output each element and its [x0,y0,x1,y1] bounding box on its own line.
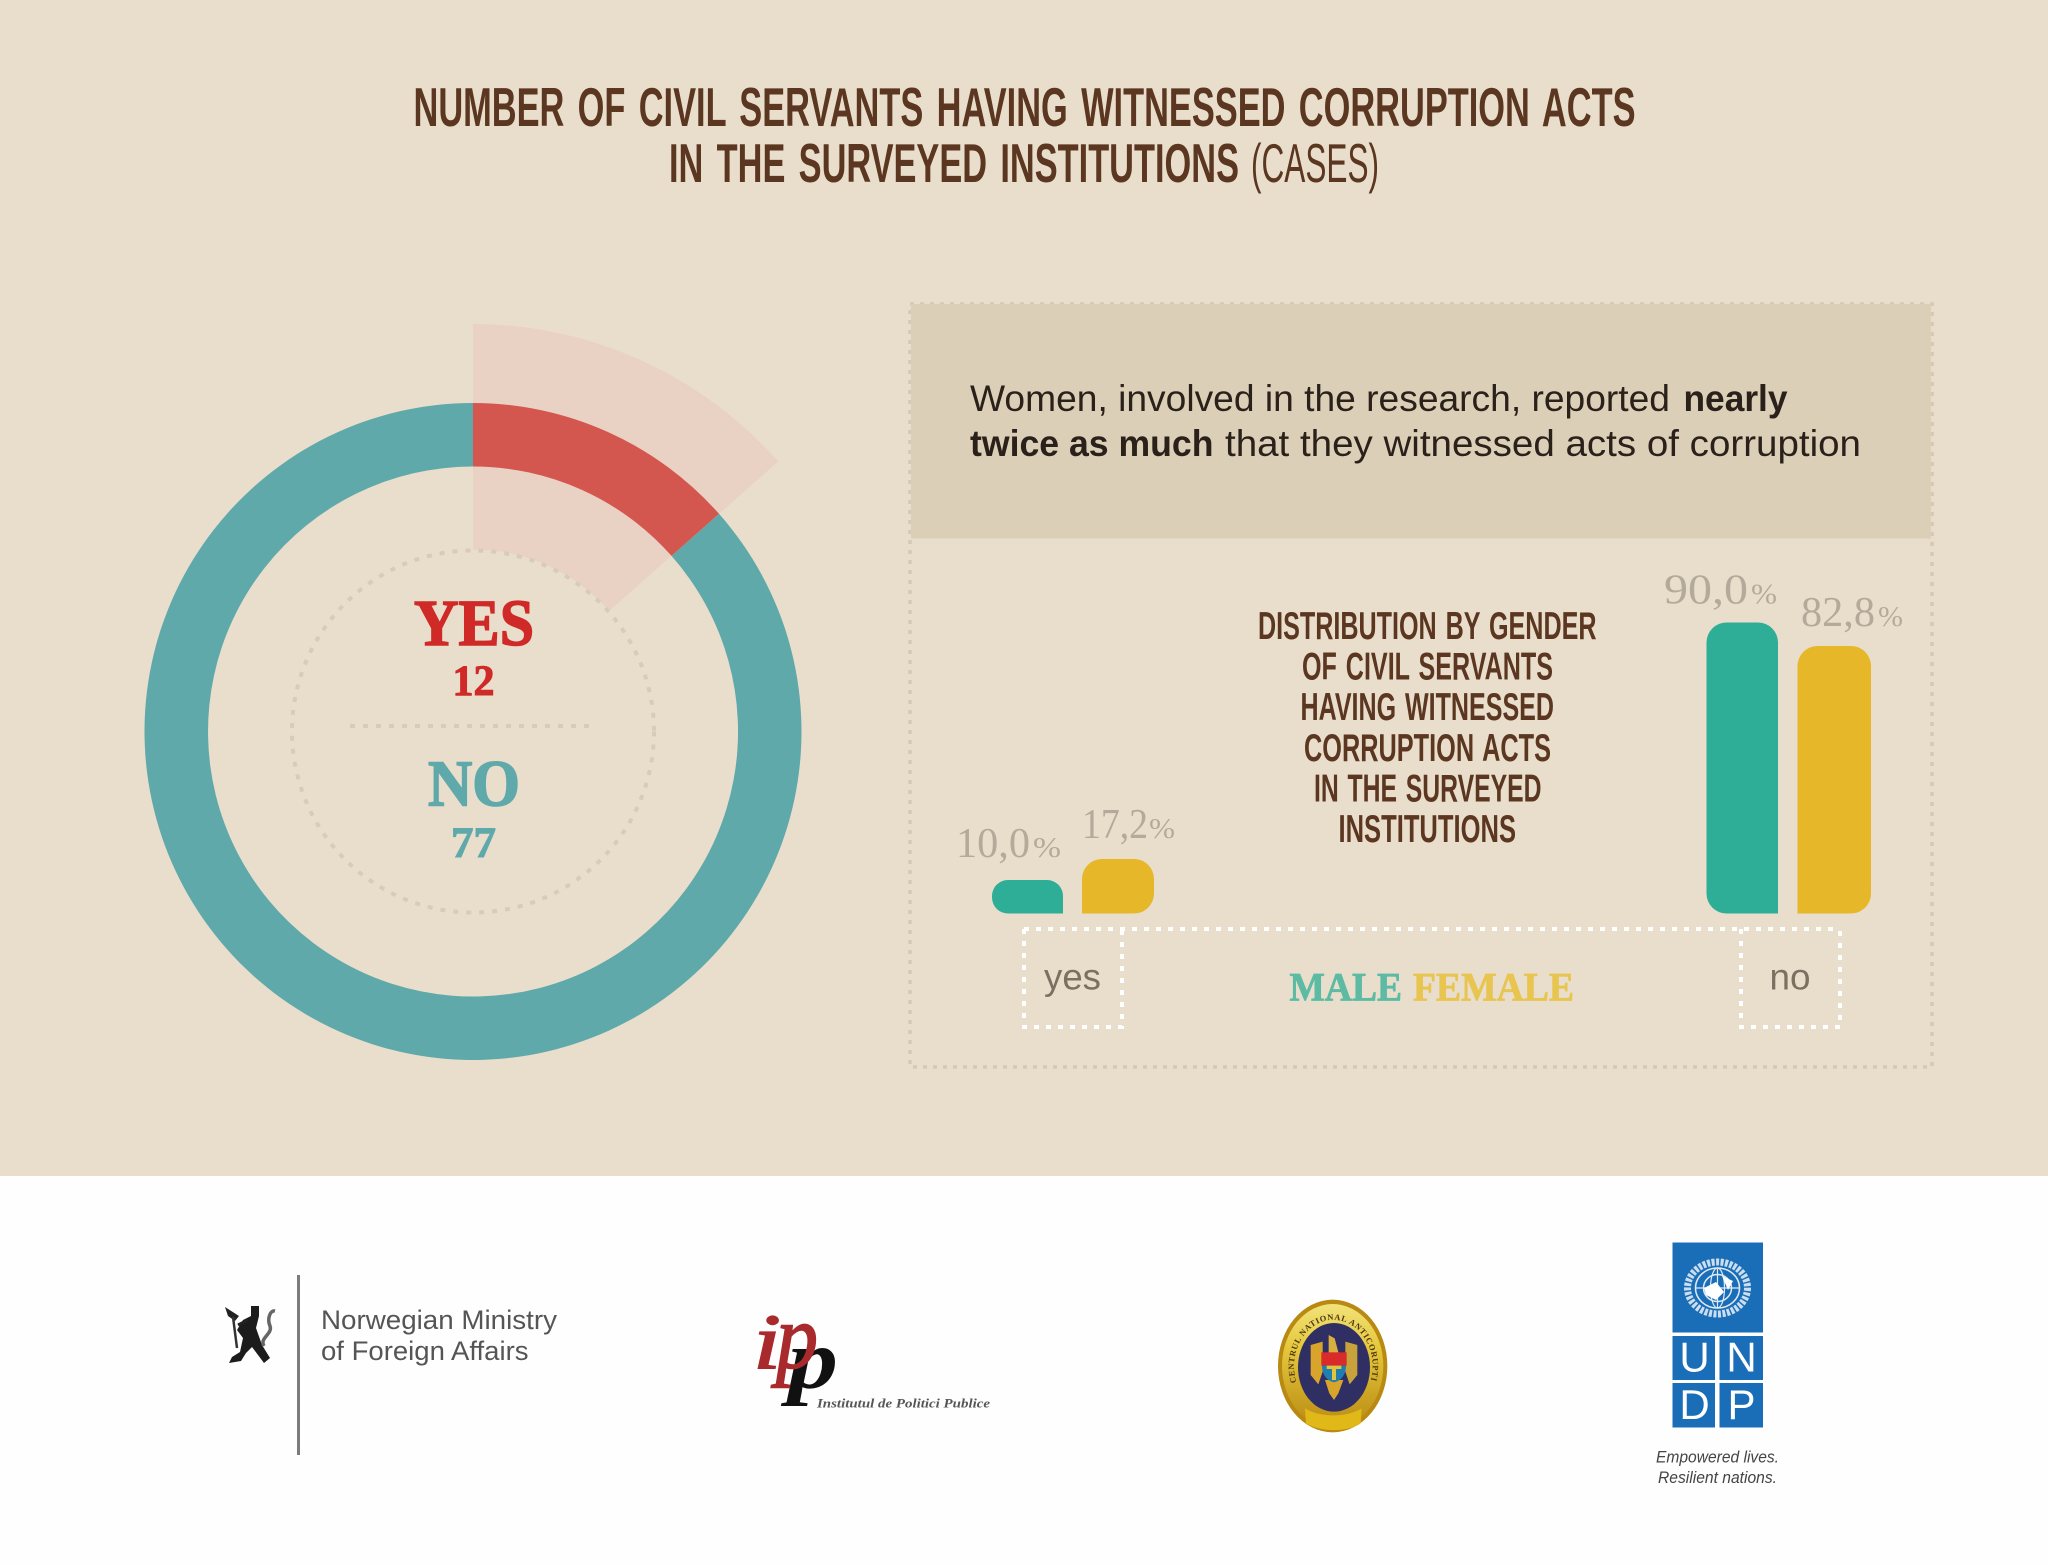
panel: gender distribution [910,304,1932,1067]
bar: yes female 17,2%: % [1149,814,1175,845]
bar: no male 90,0% [1664,568,1778,914]
chart heading: CORRUPTION ACTS [1304,727,1551,770]
bar: yes female 17,2% [1082,802,1175,914]
callout text: nearly [1684,377,1788,419]
ring segment: yes [473,403,719,556]
UNDP tagline: Empowered lives. [1656,1448,1779,1466]
chart heading: IN THE SURVEYED [1314,768,1542,810]
center label: no: 77 [451,820,496,867]
donut chart: yes 12, no 77 [144,324,801,1060]
icon: Norwegian lion [225,1306,275,1363]
chart heading: INSTITUTIONS [1338,808,1516,851]
seal ribbon [1305,1408,1362,1430]
icon: UN emblem [1688,1262,1748,1314]
center label: no: NO [428,748,520,820]
UNDP tagline [1656,1448,1779,1487]
center label: yes: 12 [452,658,494,705]
ring segment: no [144,403,801,1060]
bar: no female 82,8% [1798,590,1903,914]
bar: no female 82,8%: 82,8 [1801,590,1875,636]
callout text [970,377,1861,464]
center label: no [428,748,520,867]
UNDP letters [1679,1334,1757,1428]
callout band [911,304,1931,538]
letters ipp: p [780,1313,838,1407]
ministry name: of Foreign Affairs [321,1336,528,1366]
icon: eagle with shield [1311,1335,1357,1400]
UNDP letters: N [1726,1334,1757,1380]
center label: yes: YES [414,587,534,660]
title [414,76,1636,194]
chart heading: HAVING WITNESSED [1300,686,1554,729]
UNDP letters: D [1679,1381,1710,1428]
letters ipp: i [753,1298,781,1385]
callout text: Women, involved in the research, reported [970,377,1670,419]
bar: yes female 17,2%: 17,2 [1082,802,1148,848]
category label: no: no [1770,956,1810,998]
category axis dotted bracket [1024,929,1840,1027]
bar: yes male 10,0%: 10,0 [956,821,1030,867]
institute name: Institutul de Politici Publice [816,1396,990,1410]
logo: UNDP [1656,1242,1779,1487]
logo: Centrul National Anticoruptie seal [1278,1300,1388,1432]
callout text: twice as much [970,422,1214,464]
UNDP letters: U [1679,1334,1710,1380]
center label: yes [414,587,534,705]
bar: no female 82,8%: % [1878,602,1903,633]
ministry name: Norwegian Ministry [321,1305,558,1335]
UNDP letters: P [1727,1381,1756,1428]
ministry name [321,1305,558,1366]
chart heading [1258,605,1596,851]
chart heading: DISTRIBUTION BY GENDER [1258,605,1596,648]
title: IN THE SURVEYED INSTITUTIONS [669,132,1239,194]
category label: yes: yes [1044,956,1101,998]
bar: no male 90,0%: 90,0 [1664,568,1748,614]
letters ipp: p [771,1286,818,1388]
bar: no male 90,0%: % [1751,580,1777,610]
chart heading: OF CIVIL SERVANTS [1302,646,1553,688]
UNDP tagline: Resilient nations. [1658,1468,1777,1487]
bar: yes male 10,0% [956,821,1063,914]
logo: Institutul de Politici Publice [753,1286,990,1410]
legend: MALE [1290,964,1402,1010]
legend [1290,964,1574,1010]
letters ipp [753,1286,838,1407]
logo: Norwegian Ministry of Foreign Affairs [225,1275,558,1455]
seal lettering: CENTRUL NATIONAL ANTICORUPTIE [1288,1314,1378,1383]
highlight wedge behind yes segment [473,324,778,611]
callout text: that they witnessed acts of corruption [1225,422,1861,464]
legend: FEMALE [1413,964,1574,1010]
bar: yes male 10,0%: % [1033,833,1061,864]
title: (CASES) [1251,132,1379,194]
